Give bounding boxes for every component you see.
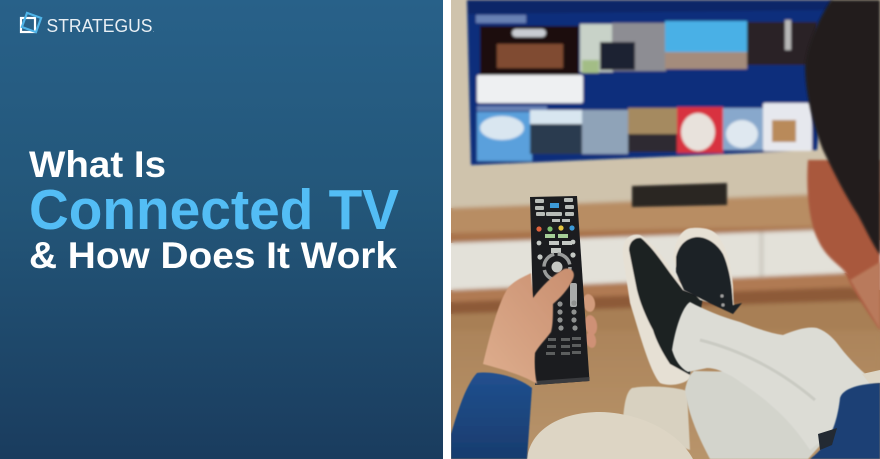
sofa piece right [862, 370, 880, 384]
seat cushion [527, 412, 693, 459]
jacket pocket [818, 428, 837, 450]
remote control [530, 196, 590, 385]
soundbar [632, 183, 727, 207]
left hand fingers [584, 294, 598, 348]
room background [451, 0, 880, 459]
trousers: crossed legs [672, 302, 875, 459]
TV screen [467, 0, 832, 165]
hand holding remote [483, 269, 574, 384]
logo: Strategus: STRATEGUS [46, 16, 152, 36]
viewer head: neck shade [850, 262, 880, 330]
title: Connected TV [29, 178, 399, 242]
viewer head: skin [807, 160, 880, 330]
photo: viewer holding remote in front of TV [451, 0, 880, 459]
right shoe [673, 228, 742, 314]
title: What Is [29, 144, 166, 185]
logo: Strategus [21, 13, 154, 36]
panel: left blue title panel [0, 0, 443, 459]
title: & How Does It Work [29, 235, 397, 276]
shirt sleeve [451, 373, 532, 459]
chair arm [623, 387, 690, 450]
title [29, 144, 399, 276]
right jacket [810, 383, 880, 459]
logo: Strategus: . [153, 28, 154, 34]
viewer head: hair [805, 0, 880, 255]
left shoe [623, 235, 703, 385]
